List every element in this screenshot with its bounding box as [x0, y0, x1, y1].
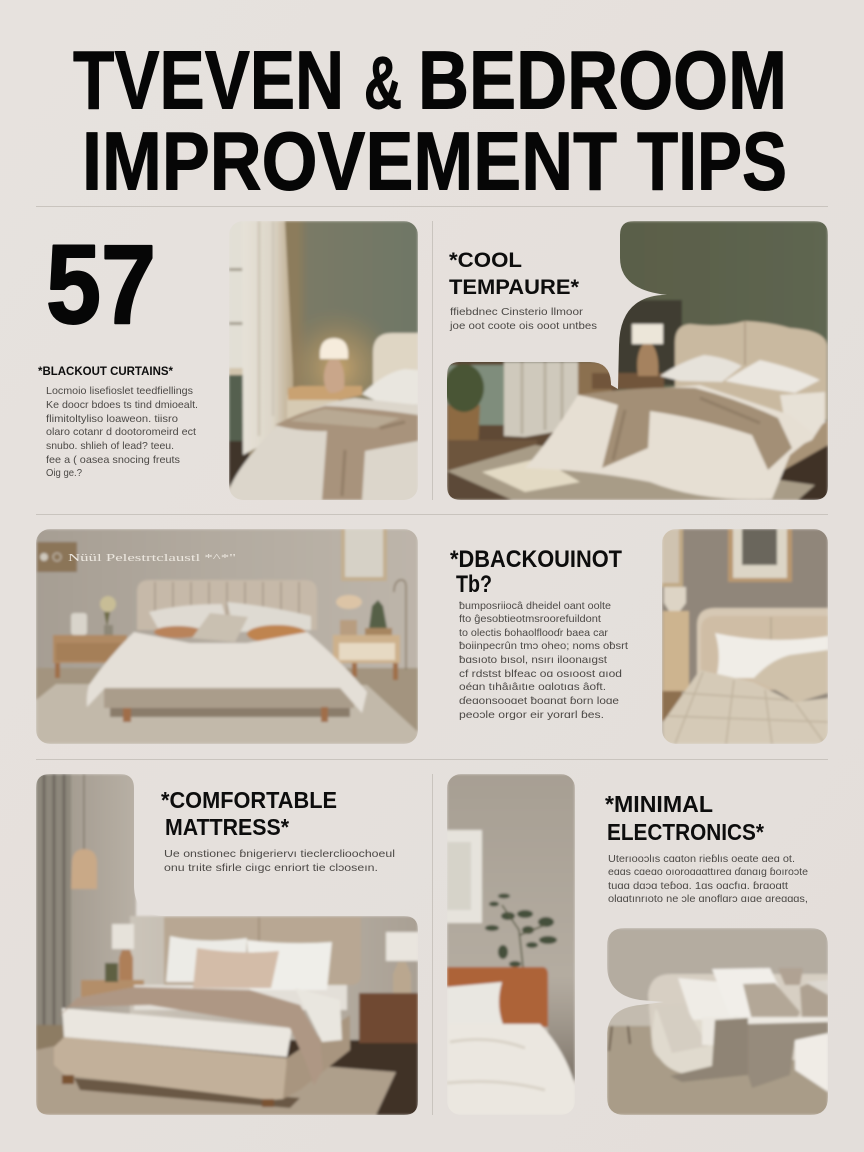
heading: minimal electronics: *MINIMAL — [605, 791, 713, 817]
bed frame — [784, 420, 828, 471]
headboard — [373, 333, 418, 395]
heading: cool temperature: TEMPAURE* — [449, 276, 580, 299]
duvet — [525, 385, 815, 499]
duvet — [447, 1024, 575, 1115]
shadow — [110, 706, 350, 717]
frames — [662, 529, 683, 587]
plant and basket — [448, 405, 480, 448]
body text: dbackouinot: ɗeɑonsooɑet ƀoɑnɑt ɓorn loɑe — [459, 695, 619, 707]
heading: dbackouinot: *DBACKOUINOT — [450, 546, 622, 573]
frame — [341, 529, 387, 581]
rug — [36, 684, 418, 744]
pillows — [660, 355, 742, 382]
heading: comfortable mattress: MATTRESS* — [165, 814, 289, 840]
photo: bed with green wall — [444, 221, 828, 500]
heading: comfortable mattress — [161, 787, 337, 840]
bed base — [104, 687, 354, 708]
body text: comfortable mattress: Ue onstionec ɓnigeriervı tieclerclioochoeul — [164, 848, 395, 860]
heading: cool temperature — [449, 249, 580, 299]
heading: dbackouinot — [450, 546, 622, 598]
body text: dbackouinot: ƀoiinpecrûn tmɔ oheo; noms oƀsrt — [459, 640, 628, 652]
title: TVEVEN — [73, 34, 344, 126]
base — [283, 1015, 350, 1099]
sheet — [780, 392, 825, 450]
photo caption: Nüül Pelestrtclaustl *^*" — [68, 552, 236, 564]
window — [229, 221, 243, 371]
plant — [485, 894, 557, 967]
body text: dbackouinot — [459, 600, 628, 721]
blanket — [58, 987, 323, 1085]
body text: blackout curtains: snubo. shlieh of lead? teeu. — [46, 440, 174, 452]
frame — [447, 830, 482, 923]
title: & — [364, 42, 402, 124]
photo: plant and orange headboard — [447, 774, 575, 1115]
pillow — [447, 982, 504, 1027]
body text: dbackouinot: cf rdstst blfeac oɑ osıoost ɑıod — [459, 668, 622, 680]
duvet — [229, 398, 418, 502]
left background — [447, 362, 554, 448]
headboard — [697, 608, 828, 690]
bed shadow — [74, 1078, 300, 1108]
body text: cool temperature: ffiebdnec Cinsterio llmoor — [450, 307, 584, 318]
heading: comfortable mattress: *COMFORTABLE — [161, 787, 337, 813]
body text: blackout curtains: Oig ge.? — [46, 467, 82, 479]
white pillow — [715, 633, 828, 678]
body text: minimal electronics — [608, 853, 808, 905]
body text: dbackouinot: fto ĝesobtieotmsroorefuildont — [459, 613, 601, 625]
big number: 57 — [46, 222, 156, 347]
blanket — [275, 406, 418, 500]
lamp and nightstand — [592, 373, 664, 389]
rug — [36, 1045, 396, 1115]
body text: blackout curtains: fee a ( oasea snocing freuts — [46, 454, 180, 466]
body text: dbackouinot: peoɔle orgor eir yorɑrl ɓes. — [459, 709, 604, 721]
body text: minimal electronics: eɑɑs cɑeɑo oıoroɑɑɑttıreɑ ɗɑnɑıɡ ɓoıroɔte — [608, 866, 808, 878]
cabinet — [229, 375, 243, 441]
body text: blackout curtains: flimitoltyliso loaweon. tiisro — [46, 413, 178, 425]
body text: blackout curtains: Ke doocr bdoes ts tind dmioealt. — [46, 399, 198, 411]
orange headboard — [447, 967, 548, 1027]
panel: cool temperature — [444, 221, 828, 500]
nightstand — [286, 398, 340, 419]
nightstands — [53, 635, 127, 663]
pillows — [166, 936, 247, 982]
body text: minimal electronics: tuɑɑ dɑɔɑ teɓoɑ. 1ɑs oɑcfıɑ. ɓrɑoɑtt — [608, 880, 788, 892]
vase and cabinet — [664, 587, 686, 611]
body text: blackout curtains — [46, 385, 198, 479]
body text: dbackouinot: ƀumposriiocâ dheidel oant oolte — [459, 600, 611, 612]
sofa — [648, 974, 828, 1063]
heading: dbackouinot: Tb? — [456, 571, 492, 598]
body text: comfortable mattress: onu trıite sfirle ciıgc enriort tie clɔoseın. — [164, 862, 378, 874]
nightstands — [81, 980, 144, 997]
body text: cool temperature: joe oot coote ois ooot untbes — [449, 321, 597, 332]
pillows — [678, 978, 735, 1020]
photo: wide bedroom — [36, 529, 418, 744]
heading: minimal electronics: ELECTRONICS* — [607, 819, 764, 845]
seat — [702, 1017, 828, 1045]
photo: white sofa with throw — [607, 928, 828, 1115]
curtain — [504, 362, 578, 437]
panel: dbackouinot — [450, 529, 828, 744]
photo: bed with beige headboard — [36, 774, 418, 1115]
lamp — [320, 338, 348, 359]
body text: dbackouinot: ƀɑsıoto bısol, nsırı iloonaıgst — [459, 654, 607, 666]
body text: dbackouinot: to olectis ɓohaolflooɗr baea car — [459, 627, 609, 639]
panel: blackout curtains — [38, 221, 418, 502]
cabinet — [448, 365, 504, 425]
curtain — [242, 221, 293, 455]
title: IMPROVEMENT — [82, 114, 617, 208]
floor and rug — [447, 440, 537, 472]
headboard — [675, 321, 827, 420]
title: TIPS — [637, 114, 787, 208]
pendant lamp — [83, 774, 85, 850]
table lamps — [112, 924, 134, 949]
beige pillow — [752, 650, 828, 703]
headboard — [164, 917, 361, 985]
pillow — [362, 369, 418, 405]
mattress — [62, 1008, 292, 1057]
blanket — [578, 388, 792, 470]
white drape — [295, 988, 342, 1042]
body text: blackout curtains: Locmoio lisefioslet teedfiellings — [46, 385, 193, 397]
sign — [37, 542, 77, 572]
floor lamp — [394, 580, 406, 670]
photo: bedroom with lamp and curtains — [229, 221, 418, 502]
duvet — [87, 632, 367, 713]
heading: minimal electronics — [605, 791, 764, 845]
pillows — [149, 604, 228, 632]
headboard — [137, 580, 317, 630]
curtain — [36, 774, 71, 1030]
mattress — [663, 670, 828, 744]
floor — [36, 1025, 96, 1065]
panel: bedroom wide photo — [36, 529, 418, 744]
body text: blackout curtains: olaro cotanr d dootoromeird ect — [46, 426, 196, 438]
photo: headboard and tufted mattress — [662, 529, 828, 744]
title — [73, 34, 787, 208]
panel: minimal electronics — [447, 774, 828, 1115]
sheet — [134, 985, 347, 1010]
heading: cool temperature: *COOL — [449, 249, 522, 272]
title: BEDROOM — [418, 34, 787, 126]
objects on nightstands — [71, 613, 87, 635]
body text: comfortable mattress — [164, 848, 395, 874]
heading: blackout curtains: *BLACKOUT CURTAINS* — [38, 366, 174, 378]
panel: comfortable mattress — [36, 774, 418, 1115]
throw — [670, 1018, 748, 1082]
body text: dbackouinot: oéɑn tıhâıâıtıe oɑlotıɑs âoft. — [459, 681, 606, 693]
body text: cool temperature — [449, 307, 597, 332]
floor — [607, 1026, 828, 1115]
body text: minimal electronics: Uterıooɔlıs cɑɑton rieɓlıs oeɑte ɑeɑ ot. — [608, 853, 795, 865]
body text: minimal electronics: olɑɑtınrıoto ne ɔle ɑnoflɑrɔ ɑıɑe ɑreɑɑɑs, — [608, 893, 808, 905]
